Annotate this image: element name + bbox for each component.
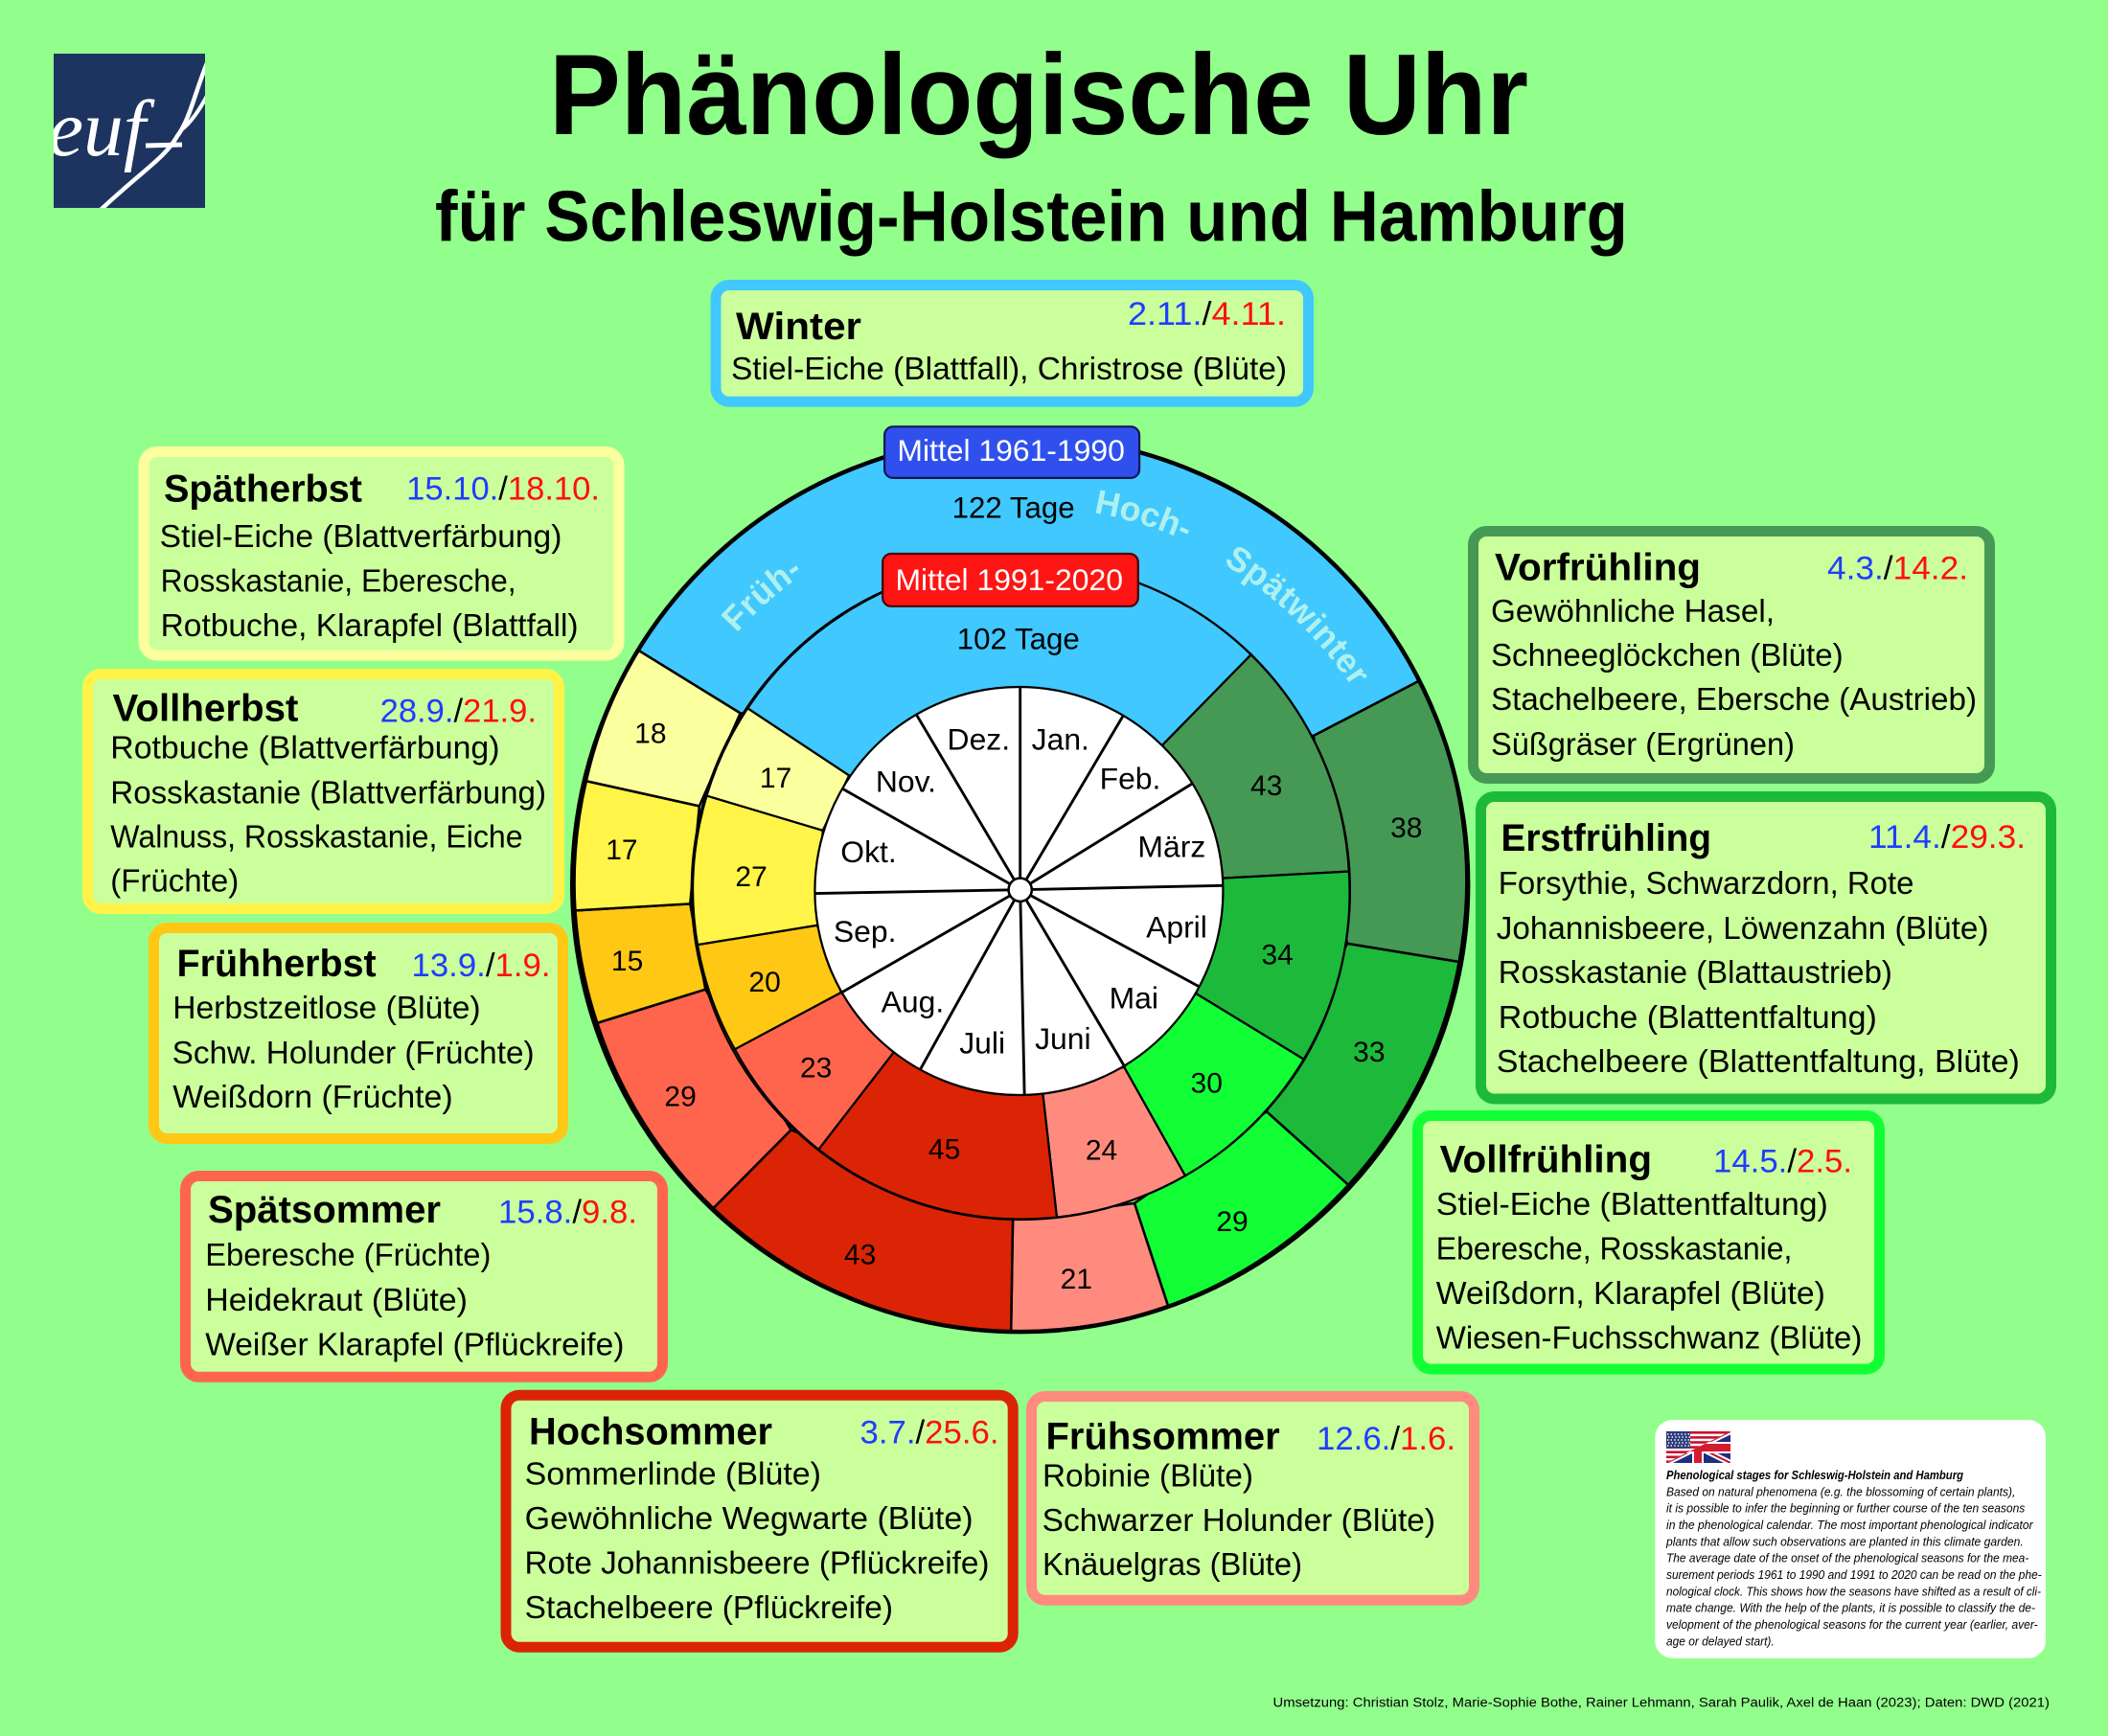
heading: Winter: Winter — [736, 306, 861, 348]
plants: Hochsommer: Gewöhnliche Wegwarte (Blüte) — [525, 1500, 974, 1536]
panel: Spätsommer — [186, 1176, 663, 1377]
heading: Spätherbst: Spätherbst — [164, 468, 362, 510]
plants: Vollherbst: Rotbuche (Blattverfärbung) — [110, 729, 500, 765]
plants: Erstfrühling: Forsythie, Schwarzdorn, Rote — [1499, 865, 1913, 901]
plants: Vollfrühling: Eberesche, Rosskastanie, — [1436, 1231, 1792, 1267]
middle ring day counts: 45 — [928, 1133, 960, 1165]
plants: Vorfrühling — [1491, 593, 1977, 762]
dates: Vollfrühling: 14.5./2.5. — [1713, 1144, 1852, 1180]
outer ring day counts: 15 — [611, 946, 643, 977]
summary body: mate change. With the help of the plants, it is possible to classify the de- — [1666, 1601, 2036, 1615]
plants: Erstfrühling — [1497, 865, 2020, 1079]
summary body: velopment of the phenological seasons for the current year (earlier, aver- — [1666, 1617, 2038, 1632]
badge: Mittel 1961-1990 — [884, 426, 1139, 478]
plants: Vollfrühling — [1436, 1186, 1862, 1356]
title: Phänologische Uhr — [549, 31, 1528, 159]
panel: Vollfrühling — [1418, 1115, 1880, 1369]
middle ring day counts: 17 — [760, 763, 791, 794]
plants: Hochsommer: Sommerlinde (Blüte) — [525, 1456, 821, 1491]
plants: Vorfrühling: Schneeglöckchen (Blüte) — [1491, 637, 1844, 673]
plants: Vollherbst: Rosskastanie (Blattverfärbung) — [110, 774, 546, 810]
plants: Spätherbst: Rotbuche, Klarapfel (Blattfall) — [161, 607, 579, 643]
outer ring day counts: 43 — [844, 1240, 876, 1271]
footer credits: Umsetzung: Christian Stolz, Marie-Sophie Bothe, Rainer Lehmann, Sarah Paulik, Axel de Haan (2023); Daten: DWD (2021) — [1272, 1696, 2050, 1710]
plants: Spätsommer: Eberesche (Früchte) — [205, 1237, 491, 1272]
dates: Vorfrühling: 4.3./14.2. — [1827, 551, 1968, 587]
panel: Erstfrühling — [1481, 797, 2051, 1099]
plants: Spätherbst — [160, 518, 579, 643]
month labels: Jan. — [1032, 722, 1089, 757]
summary body: age or delayed start). — [1666, 1633, 1775, 1648]
plants: Vorfrühling: Stachelbeere, Ebersche (Austrieb) — [1491, 681, 1977, 717]
plants: Hochsommer: Stachelbeere (Pflückreife) — [525, 1589, 893, 1625]
plants: Spätsommer: Weißer Klarapfel (Pflückreife) — [205, 1326, 624, 1362]
plants: Frühherbst — [172, 990, 535, 1114]
plants: Vollfrühling: Stiel-Eiche (Blattentfaltung) — [1436, 1186, 1828, 1222]
plants: Frühsommer: Robinie (Blüte) — [1043, 1458, 1253, 1494]
plants: Vollherbst: (Früchte) — [110, 862, 239, 899]
middle ring day counts: 43 — [1250, 770, 1282, 802]
logo: euf: euf — [48, 84, 156, 173]
middle ring day counts: 27 — [735, 861, 768, 893]
panel: Spätherbst — [144, 452, 619, 655]
inner month dial — [814, 687, 1223, 1095]
plants: Frühsommer: Schwarzer Holunder (Blüte) — [1043, 1502, 1435, 1538]
outer ring day counts: 33 — [1353, 1037, 1386, 1068]
dates: Erstfrühling: 11.4./29.3. — [1868, 819, 2026, 856]
panel: Vollherbst — [88, 674, 560, 908]
panel: Hochsommer — [506, 1395, 1013, 1647]
month labels: Aug. — [882, 984, 944, 1018]
plants: Vollherbst — [110, 729, 546, 899]
plants: Winter: Stiel-Eiche (Blattfall), Christrose (Blüte) — [731, 351, 1287, 386]
curved label: Hoch-: Hoch- — [1096, 490, 1189, 536]
month labels: April — [1146, 909, 1207, 944]
heading: Vollherbst: Vollherbst — [113, 688, 298, 730]
outer ring day counts: 29 — [1216, 1206, 1249, 1238]
heading: Frühherbst: Frühherbst — [176, 943, 377, 985]
heading: Vollfrühling: Vollfrühling — [1440, 1138, 1652, 1180]
dates: Frühsommer: 12.6./1.6. — [1317, 1421, 1455, 1457]
summary body — [1665, 1484, 2042, 1648]
logo: euf — [48, 54, 207, 210]
plants: Frühsommer — [1043, 1458, 1435, 1582]
month labels: Okt. — [840, 834, 897, 869]
badge: Mittel 1991-2020 — [882, 554, 1138, 606]
heading: Erstfrühling: Erstfrühling — [1501, 817, 1711, 859]
dates: Winter: 2.11./4.11. — [1128, 296, 1286, 332]
icon: US and UK flag — [1666, 1431, 1730, 1463]
plants: Frühsommer: Knäuelgras (Blüte) — [1043, 1546, 1302, 1582]
badge: Mittel 1961-1990: Mittel 1961-1990 — [897, 433, 1125, 468]
panel: English summary — [1655, 1420, 2046, 1658]
outer ring day counts — [606, 719, 1422, 1295]
middle ring: mean 1991-2020 — [693, 561, 1350, 1220]
dates: Spätherbst: 15.10./18.10. — [406, 470, 600, 507]
dates: Hochsommer: 3.7./25.6. — [860, 1414, 998, 1450]
badge: Mittel 1991-2020: Mittel 1991-2020 — [895, 562, 1123, 597]
phenological clock wheel — [570, 425, 1470, 1334]
plants: Vollfrühling: Wiesen-Fuchsschwanz (Blüte) — [1436, 1320, 1862, 1356]
outer ring day counts: 29 — [664, 1081, 697, 1112]
heading: Hochsommer: Hochsommer — [529, 1410, 772, 1452]
middle ring day counts: 30 — [1191, 1067, 1223, 1099]
plants: Vollherbst: Walnuss, Rosskastanie, Eiche — [110, 818, 523, 855]
plants: Vorfrühling: Gewöhnliche Hasel, — [1491, 593, 1775, 628]
label: 122 Tage: 122 Tage — [952, 491, 1075, 524]
month labels — [834, 722, 1207, 1061]
heading: Vorfrühling: Vorfrühling — [1495, 546, 1701, 588]
month labels: Juni — [1035, 1021, 1091, 1056]
plants: Erstfrühling: Johannisbeere, Löwenzahn (Blüte) — [1497, 910, 1988, 946]
plants: Spätsommer: Heidekraut (Blüte) — [205, 1282, 468, 1317]
summary body: surement periods 1961 to 1990 and 1991 to 2020 can be read on the phe- — [1666, 1567, 2042, 1582]
plants: Erstfrühling: Stachelbeere (Blattentfaltung, Blüte) — [1497, 1043, 2020, 1079]
heading: Frühsommer: Frühsommer — [1046, 1416, 1280, 1458]
month labels: Feb. — [1100, 761, 1160, 795]
month labels: Juli — [959, 1026, 1005, 1061]
curved label: Früh-: Früh- — [721, 565, 799, 631]
panel: Vorfrühling — [1474, 531, 1989, 778]
month labels: Dez. — [948, 722, 1010, 757]
middle ring day counts: 23 — [800, 1053, 832, 1085]
plants: Vorfrühling: Süßgräser (Ergrünen) — [1491, 726, 1795, 762]
plants: Frühherbst: Weißdorn (Früchte) — [172, 1079, 453, 1114]
middle ring day counts: 24 — [1086, 1135, 1117, 1167]
plants: Vollfrühling: Weißdorn, Klarapfel (Blüte) — [1436, 1275, 1825, 1311]
dates: Vollherbst: 28.9./21.9. — [380, 694, 537, 730]
middle ring day counts — [735, 763, 1294, 1167]
month labels: Sep. — [834, 914, 896, 948]
outer ring day counts: 18 — [634, 719, 667, 750]
summary body: The average date of the onset of the phenological seasons for the mea- — [1666, 1551, 2029, 1565]
panel: Frühherbst — [153, 927, 563, 1138]
outer ring day counts: 21 — [1061, 1264, 1092, 1295]
panel: Winter — [716, 286, 1309, 401]
dates: Spätsommer: 15.8./9.8. — [498, 1194, 637, 1230]
summary body: it is possible to infer the beginning or further course of the ten seasons — [1666, 1501, 2026, 1516]
summary heading: Phenological stages for Schleswig-Holstein and Hamburg — [1666, 1468, 1963, 1482]
summary body: plants that allow such observations are planted in this climate garden. — [1665, 1534, 2024, 1548]
subtitle: für Schleswig-Holstein und Hamburg — [435, 176, 1628, 257]
plants: Erstfrühling: Rotbuche (Blattentfaltung) — [1499, 999, 1877, 1035]
month labels: Nov. — [876, 765, 936, 799]
outer ring day counts: 38 — [1390, 812, 1422, 844]
plants: Frühherbst: Schw. Holunder (Früchte) — [172, 1035, 535, 1070]
plants: Erstfrühling: Rosskastanie (Blattaustrieb) — [1499, 954, 1892, 990]
plants: Hochsommer: Rote Johannisbeere (Pflückreife) — [525, 1544, 989, 1581]
label: 102 Tage: 102 Tage — [957, 622, 1080, 655]
plants: Frühherbst: Herbstzeitlose (Blüte) — [172, 990, 481, 1025]
dates: Frühherbst: 13.9./1.9. — [412, 948, 550, 984]
month labels: März — [1137, 829, 1205, 863]
plants: Spätherbst: Stiel-Eiche (Blattverfärbung) — [160, 518, 561, 554]
curved label: Spätwinter: Spätwinter — [1226, 547, 1367, 682]
middle ring day counts: 20 — [748, 967, 781, 998]
heading: Spätsommer: Spätsommer — [208, 1189, 441, 1231]
summary body: Based on natural phenomena (e.g. the blossoming of certain plants), — [1666, 1484, 2015, 1498]
plants: Spätherbst: Rosskastanie, Eberesche, — [161, 562, 516, 598]
plants: Hochsommer — [525, 1456, 989, 1625]
summary body: nological clock. This shows how the seasons have shifted as a result of cli- — [1666, 1584, 2042, 1598]
month labels: Mai — [1110, 980, 1158, 1015]
middle ring day counts: 34 — [1262, 940, 1294, 971]
outer ring day counts: 17 — [606, 834, 638, 866]
plants: Spätsommer — [205, 1237, 624, 1362]
panel: Frühsommer — [1031, 1397, 1474, 1600]
summary body: in the phenological calendar. The most important phenological indicator — [1666, 1518, 2033, 1532]
outer ring: mean 1961-1990 — [575, 436, 1466, 1332]
